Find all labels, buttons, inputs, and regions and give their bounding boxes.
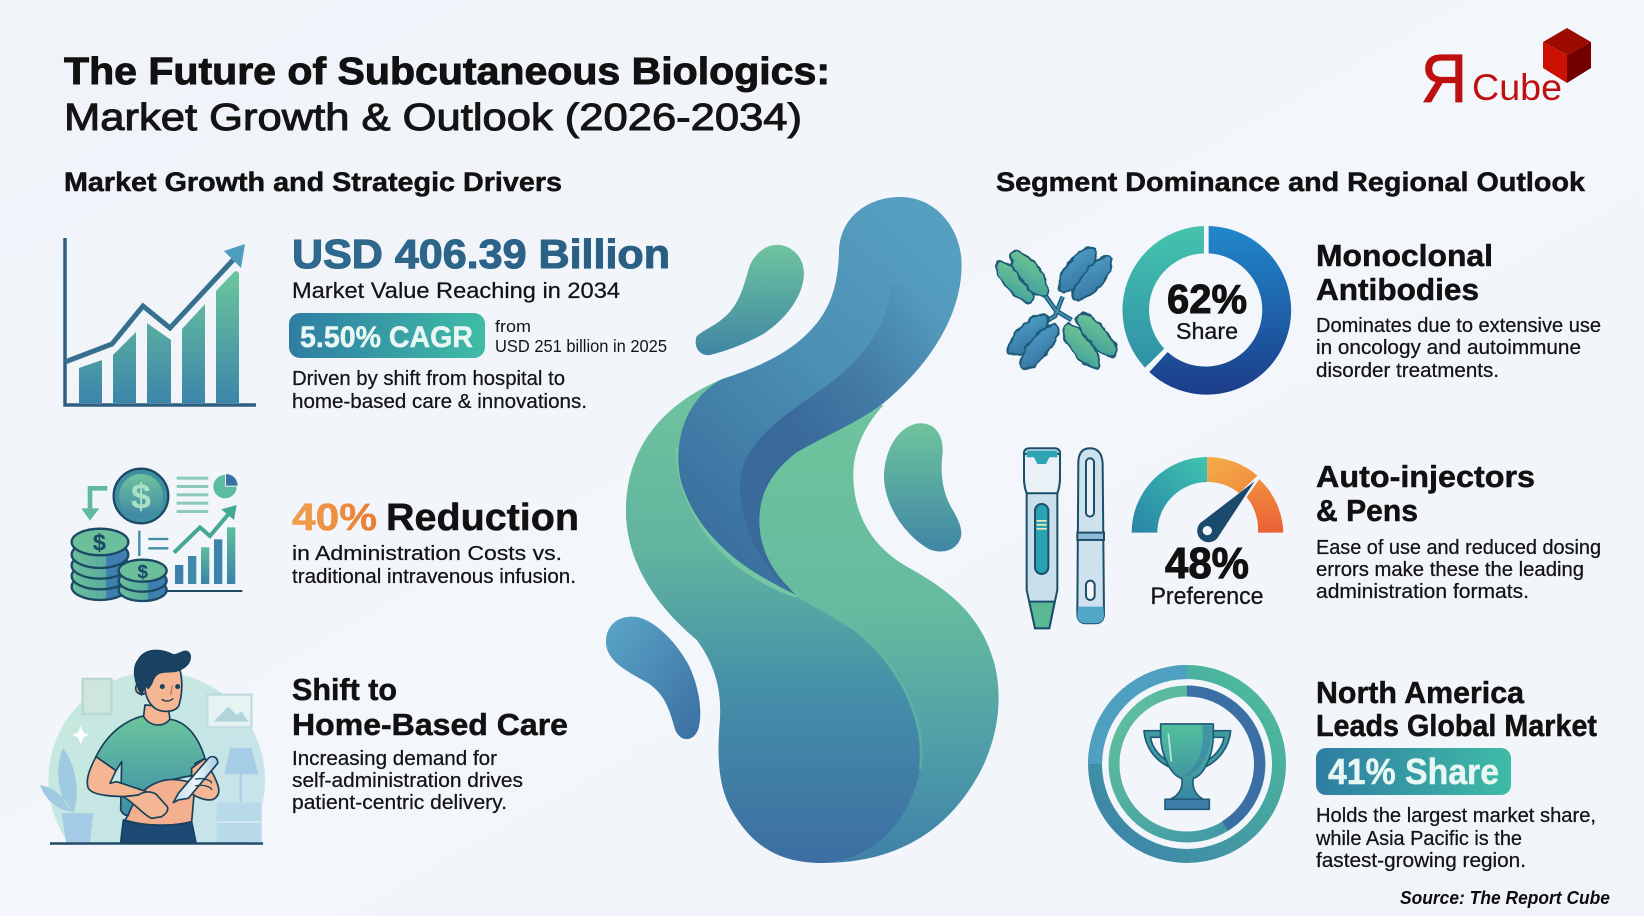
icon: coins and cost chart: $ <box>131 478 151 517</box>
icon: antibody <box>990 242 1122 374</box>
pill: CAGR <box>289 313 485 358</box>
text: auto-injectors and pens: errors make these the leading <box>1316 559 1584 581</box>
chart: 48% preference gauge: 48% <box>1165 539 1249 588</box>
heading: left section: Market Growth and Strategic Drivers <box>64 167 562 197</box>
title: The Future of Subcutaneous Biologics: <box>64 51 830 93</box>
stat: home-based care: self-administration drives <box>292 770 523 792</box>
stat: home-based care <box>292 672 568 814</box>
title: Market Growth & Outlook (2026-2034) <box>64 97 802 139</box>
stat: cost reduction <box>292 497 579 588</box>
stat: home-based care: Home-Based Care <box>292 707 568 742</box>
chart: 62% share donut: Share <box>1176 318 1238 344</box>
chart: 62% share donut <box>1122 226 1291 395</box>
stat: market value: from <box>495 317 531 336</box>
icon: patient self-injecting at home <box>40 650 265 845</box>
text: monoclonal antibodies: disorder treatments. <box>1316 360 1499 382</box>
pill: CAGR: 5.50% CAGR <box>300 321 473 354</box>
text: auto-injectors and pens <box>1316 459 1601 603</box>
heading: right section: Segment Dominance and Regional Outlook <box>996 167 1586 197</box>
text: monoclonal antibodies <box>1316 238 1601 382</box>
figure <box>87 650 219 843</box>
text: north america <box>1315 675 1597 872</box>
title <box>64 51 830 139</box>
icon: coins and cost chart: $ <box>137 561 148 582</box>
stat: market value <box>289 231 670 413</box>
stat: market value: Market Value Reaching in 2034 <box>292 278 620 303</box>
icon: auto-injector and pen <box>1024 448 1104 628</box>
text: monoclonal antibodies: Monoclonal <box>1316 238 1493 273</box>
text: monoclonal antibodies: Dominates due to extensive use <box>1316 315 1601 337</box>
logo: RCube: Я <box>1421 41 1467 117</box>
stat: home-based care: patient-centric delivery. <box>292 792 507 814</box>
icon: growth bar chart <box>65 238 256 405</box>
chart: 48% preference gauge: Preference <box>1150 583 1264 610</box>
text: monoclonal antibodies: in oncology and autoimmune <box>1316 337 1581 359</box>
text: north america: while Asia Pacific is the <box>1315 828 1522 850</box>
text: auto-injectors and pens: administration formats. <box>1316 581 1529 603</box>
stat: market value: USD 406.39 Billion <box>292 231 670 277</box>
pill: 41% share: 41% Share <box>1328 751 1499 792</box>
stat: cost reduction: in Administration Costs vs. <box>292 543 562 565</box>
text: monoclonal antibodies: Antibodies <box>1316 272 1479 307</box>
text: auto-injectors and pens: Auto-injectors <box>1316 459 1535 494</box>
icon: trophy in concentric rings <box>1095 672 1279 856</box>
text: north america: Leads Global Market <box>1316 708 1597 743</box>
source note: Source: The Report Cube <box>1400 888 1610 908</box>
chart: 62% share donut: 62% <box>1167 276 1247 322</box>
stat: market value: home-based care & innovations. <box>292 391 587 413</box>
text: north america: North America <box>1316 675 1525 710</box>
icon: coins and cost chart <box>72 469 242 601</box>
text: auto-injectors and pens: & Pens <box>1316 493 1418 528</box>
stat: cost reduction: traditional intravenous infusion. <box>292 566 576 588</box>
text: north america: Holds the largest market share, <box>1316 805 1596 827</box>
stat: home-based care: Increasing demand for <box>292 748 497 770</box>
chart: 48% preference gauge <box>1132 457 1283 610</box>
stat: market value: Driven by shift from hospital to <box>292 368 565 390</box>
logo: RCube <box>1421 28 1591 117</box>
stat: cost reduction: Reduction <box>386 497 579 539</box>
stat: home-based care: Shift to <box>292 672 397 707</box>
icon: coins and cost chart: $ <box>93 530 106 556</box>
central flowing droplet graphic <box>606 197 999 863</box>
text: auto-injectors and pens: Ease of use and reduced dosing <box>1316 537 1601 559</box>
text: north america: fastest-growing region. <box>1316 850 1526 872</box>
stat: market value: USD 251 billion in 2025 <box>495 336 667 356</box>
stat: cost reduction: 40% <box>292 497 377 539</box>
logo: RCube: Cube <box>1472 67 1562 108</box>
